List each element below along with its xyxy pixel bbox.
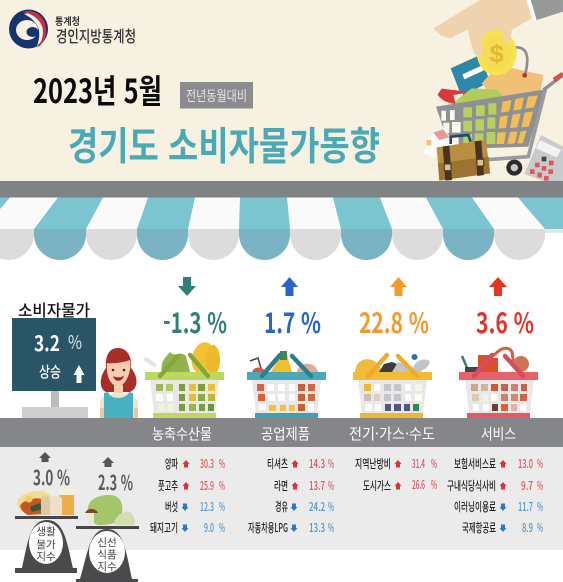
category band	[0, 418, 563, 447]
table column: service items: %	[537, 477, 543, 494]
badge: year on year	[180, 82, 253, 108]
table column: agricultural items: %	[219, 519, 225, 536]
label: 신선	[97, 535, 117, 550]
dial	[29, 522, 63, 564]
table column: agricultural items: 버섯	[165, 498, 178, 515]
table column: utility items: %	[431, 476, 437, 493]
arrow up	[489, 277, 507, 296]
table column: utility items: 도시가스	[363, 477, 391, 494]
table column: industrial items: %	[328, 519, 334, 536]
price sign	[12, 318, 96, 418]
table column: industrial items: %	[328, 477, 334, 494]
basket with utilities	[353, 354, 432, 418]
label: 식품	[97, 547, 117, 562]
value: 2.3 %	[98, 467, 133, 496]
dial	[89, 531, 125, 573]
table column: agricultural items: 30.3	[200, 455, 214, 472]
value: -1.3 %	[163, 302, 227, 342]
value: 3.0 %	[33, 462, 70, 491]
table column: industrial items: %	[328, 455, 334, 472]
value: 3.6 %	[476, 302, 534, 342]
table column: agricultural items: 12.3	[200, 498, 214, 515]
date heading: 2023년 5월	[33, 65, 162, 113]
table column: industrial items: 자동차용LPG	[248, 519, 288, 536]
basket with goods	[247, 351, 326, 418]
basket with vegetables	[143, 340, 224, 418]
value: 1.7 %	[264, 302, 321, 342]
table column: service items: %	[537, 455, 543, 472]
table column: industrial items: 라면	[274, 477, 288, 494]
scale: living price index	[15, 452, 78, 573]
illustration: hand, coin and shopping cart: $	[490, 40, 504, 68]
category 3: electricity, gas, water	[349, 277, 435, 444]
table column: industrial items	[248, 455, 334, 536]
value: 22.8 %	[359, 302, 429, 342]
label: 지수	[36, 549, 56, 564]
table column: service items: 구내식당식사비	[447, 477, 496, 494]
icon: shopkeeper woman	[100, 348, 138, 418]
table column: service items: 국제항공료	[462, 519, 496, 536]
table column: industrial items: 티셔츠	[267, 455, 288, 472]
label: 물가	[36, 537, 56, 552]
table column: service items: 보험서비스료	[454, 455, 496, 472]
name: 전기·가스·수도	[349, 423, 435, 444]
table column: agricultural items: %	[219, 498, 225, 515]
price sign: 상승	[39, 361, 61, 382]
category 1: agricultural products	[143, 277, 227, 444]
awning bar	[0, 181, 563, 198]
logo: statistics office emblem	[9, 10, 48, 48]
table column: service items: %	[537, 519, 543, 536]
table column: service items: 이러닝이용료	[454, 498, 496, 515]
name: 농축수산물	[152, 423, 212, 444]
table column: industrial items: 13.3	[309, 519, 325, 536]
table column: service items: %	[537, 498, 543, 515]
table column: agricultural items: %	[219, 455, 225, 472]
illustration: hand, coin and shopping cart	[423, 0, 563, 181]
table column: utility items: 31.4	[412, 455, 425, 472]
header background	[0, 0, 563, 181]
label: 생활	[36, 524, 56, 539]
table column: industrial items: 24.2	[309, 498, 325, 515]
plate	[76, 526, 139, 529]
table column: service items: 13.0	[518, 455, 533, 472]
arrow up	[390, 277, 407, 296]
food on plate	[17, 489, 74, 515]
price sign: 3.2	[34, 328, 60, 358]
table column: service items: 9.7	[521, 477, 533, 494]
table column: utility items	[355, 455, 437, 494]
table column: service items: 8.9	[522, 519, 533, 536]
plate	[15, 516, 78, 519]
badge: year on year: 전년동월대비	[186, 86, 247, 106]
arrow down	[178, 277, 196, 296]
scale: fresh food index	[76, 457, 139, 582]
arrow up	[102, 457, 114, 467]
table column: agricultural items: 양파	[165, 455, 178, 472]
awning	[0, 198, 563, 260]
lower grey panel	[0, 447, 563, 550]
table column: industrial items: %	[328, 498, 334, 515]
table column: agricultural items: 돼지고기	[150, 519, 178, 536]
category 2: industrial products	[247, 277, 326, 444]
name: 서비스	[481, 423, 516, 444]
table column: agricultural items: %	[219, 477, 225, 494]
arrow up	[39, 452, 51, 462]
logo text: regional office: 경인지방통계청	[56, 23, 136, 47]
table column: utility items: 26.6	[412, 476, 425, 493]
vegetables on plate	[85, 495, 135, 525]
table column: industrial items: 14.3	[309, 455, 325, 472]
table column: agricultural items: 9.0	[204, 519, 214, 536]
name: 공업제품	[261, 423, 310, 444]
label: 지수	[97, 559, 117, 574]
scale body	[76, 529, 138, 582]
table column: agricultural items: 풋고추	[158, 477, 178, 494]
table column: service items: 11.7	[518, 498, 533, 515]
table column: agricultural items	[150, 455, 225, 536]
logo text: parent agency: 통계청	[55, 13, 80, 28]
category 4: services	[459, 277, 538, 444]
table column: utility items: %	[431, 455, 437, 472]
table column: industrial items: 경유	[275, 498, 288, 515]
table column: service items	[447, 455, 543, 536]
sign heading: 소비자물가	[18, 297, 90, 321]
table column: agricultural items: 25.9	[200, 477, 214, 494]
table column: industrial items: 13.7	[309, 477, 325, 494]
main title: 경기도 소비자물가동향	[68, 116, 380, 172]
table column: utility items: 지역난방비	[355, 455, 391, 472]
arrow up	[281, 277, 298, 296]
price sign: %	[68, 328, 82, 355]
basket with services	[459, 348, 538, 418]
scale body	[15, 520, 77, 573]
